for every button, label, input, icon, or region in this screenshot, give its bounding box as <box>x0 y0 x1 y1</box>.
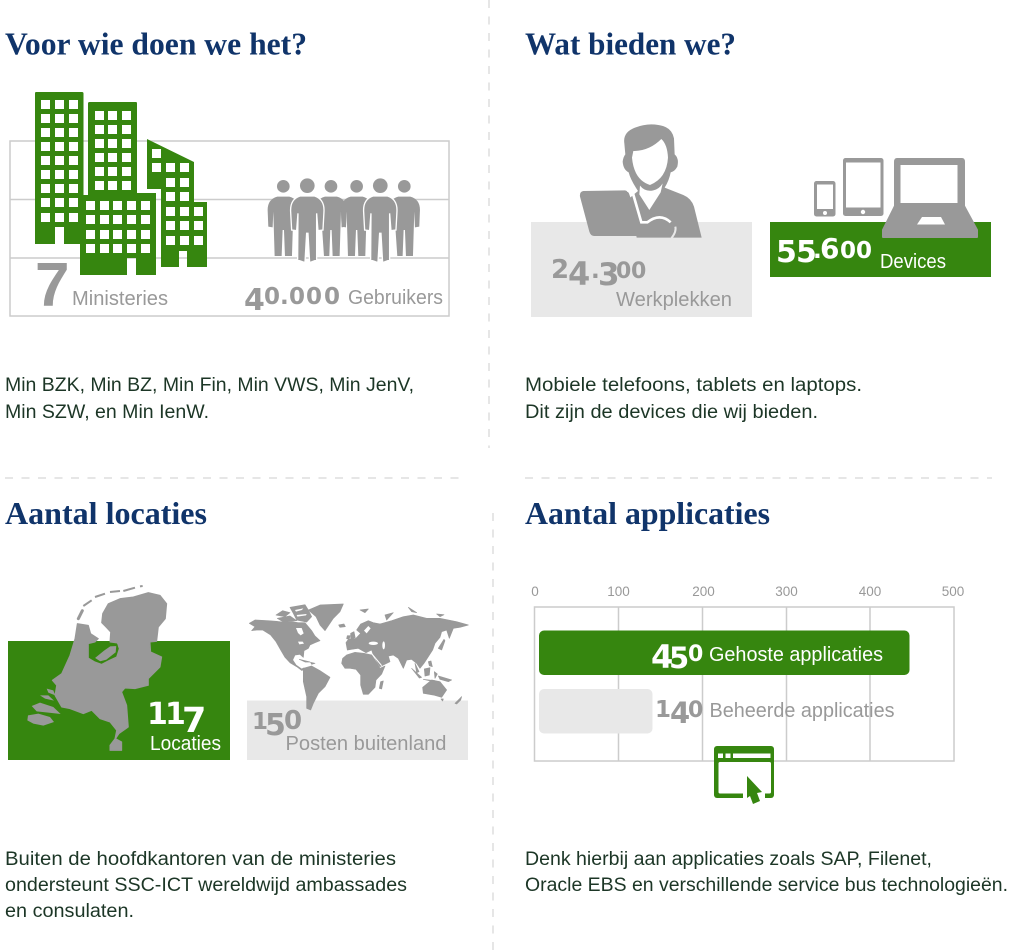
stat: 24.300 werkplekken: 4 <box>568 255 590 293</box>
stat: 450 gehoste applicaties: 4 <box>651 638 673 676</box>
axis labels: 400 <box>859 584 881 599</box>
icon: group of people <box>268 178 420 263</box>
stat: 150 posten buitenland: 5 <box>265 708 286 743</box>
text: applicaties description: Denk hierbij aan applicaties zoals SAP, Filenet, <box>525 849 932 870</box>
stat: 117 locaties: 1 <box>147 697 168 732</box>
bar: gehoste applicaties <box>539 630 910 675</box>
stat: 40.000 gebruikers <box>244 283 443 318</box>
stat: 150 posten buitenland: Posten buitenland <box>286 733 446 755</box>
stat: 40.000 gebruikers: 0 <box>324 284 340 310</box>
text: ministeries list: Min SZW, en Min IenW. <box>5 402 209 423</box>
icon: laptop <box>883 158 977 237</box>
bar: beheerde applicaties <box>539 689 652 734</box>
stat: 55.600 devices: Devices <box>880 251 946 273</box>
icon: map of the Netherlands <box>27 586 167 750</box>
axis labels: 300 <box>775 584 798 599</box>
panel: wat bieden we <box>525 26 991 423</box>
icon: phone <box>814 181 836 216</box>
stat: 55.600 devices: 0 <box>856 238 872 264</box>
text: locaties description <box>5 849 407 922</box>
text: applicaties description: Oracle EBS en verschillende service bus technologieën. <box>525 875 1008 896</box>
stat: 7 ministeries: 7 <box>35 251 69 320</box>
stat: 40.000 gebruikers: 0 <box>289 284 305 310</box>
icon: green office buildings <box>35 92 207 275</box>
stat: 40.000 gebruikers: Gebruikers <box>348 287 443 309</box>
stat box: devices <box>770 222 991 277</box>
stat: 40.000 gebruikers: . <box>280 284 289 310</box>
stat: 24.300 werkplekken: . <box>591 258 600 284</box>
stat: 55.600 devices: 0 <box>840 238 856 264</box>
icon: tablet <box>843 158 884 216</box>
heading: voor wie doen we het: Voor wie doen we het? <box>5 26 307 62</box>
icon: person with laptop <box>580 124 702 238</box>
heading: wat bieden we: Wat bieden we? <box>525 26 736 62</box>
heading: aantal locaties: Aantal locaties <box>5 495 207 531</box>
icon: world map <box>249 604 468 710</box>
stat: 24.300 werkplekken: 3 <box>598 257 620 293</box>
text: locaties description: en consulaten. <box>5 901 134 922</box>
stat: 450 gehoste applicaties <box>651 638 883 676</box>
stat: 117 locaties: Locaties <box>150 733 221 755</box>
text: applicaties description <box>525 849 1008 896</box>
stat: 150 posten buitenland <box>252 706 446 755</box>
stat: 450 gehoste applicaties: Gehoste applicaties <box>709 644 883 666</box>
stat: 40.000 gebruikers: 0 <box>306 284 322 310</box>
text: ministeries list: Min BZK, Min BZ, Min Fin, Min VWS, Min JenV, <box>5 375 414 396</box>
stat: 24.300 werkplekken: 0 <box>631 259 646 284</box>
stat: 55.600 devices <box>776 232 946 273</box>
text: devices description <box>525 375 862 423</box>
axis labels: 0 <box>531 584 539 599</box>
bar chart: applicaties <box>531 584 964 761</box>
stat: 117 locaties: 7 <box>182 701 206 741</box>
stat: 40.000 gebruikers: 0 <box>264 284 280 310</box>
stat: 117 locaties: 1 <box>165 697 186 732</box>
stat: 55.600 devices: 5 <box>776 235 797 270</box>
stat box: locaties <box>8 641 230 760</box>
stat: 140 beheerde applicaties <box>655 696 894 730</box>
stat: 117 locaties <box>147 697 221 755</box>
stat: 150 posten buitenland: 0 <box>284 706 302 736</box>
panel: aantal locaties <box>5 495 468 922</box>
text: locaties description: Buiten de hoofdkantoren van de ministeries <box>5 849 396 870</box>
stat: 55.600 devices: 5 <box>796 235 817 270</box>
stat: 24.300 werkplekken: 0 <box>616 259 631 284</box>
panel: voor wie doen we het <box>5 26 449 423</box>
stat: 140 beheerde applicaties: 0 <box>688 698 703 723</box>
axis labels: 200 <box>692 584 715 599</box>
text: ministeries list <box>5 375 414 423</box>
stat: 150 posten buitenland: 1 <box>252 709 268 735</box>
stat: 55.600 devices: 6 <box>820 232 839 265</box>
panel: aantal applicaties <box>525 495 1008 896</box>
stat: 450 gehoste applicaties: 0 <box>688 642 703 667</box>
stat: 140 beheerde applicaties: Beheerde applicaties <box>710 700 894 722</box>
stat: 40.000 gebruikers: 4 <box>244 283 265 318</box>
stat: 55.600 devices: . <box>813 238 822 264</box>
text: devices description: Dit zijn de devices die wij bieden. <box>525 402 818 423</box>
stat box: werkplekken <box>531 222 752 317</box>
axis labels: 100 <box>607 584 630 599</box>
chart grid: ministeries and gebruikers <box>10 141 449 316</box>
axis labels <box>531 584 964 599</box>
stat: 24.300 werkplekken: Werkplekken <box>616 289 732 311</box>
stat: 7 ministeries <box>35 251 168 320</box>
text: locaties description: ondersteunt SSC-ICT wereldwijd ambassades <box>5 875 407 896</box>
stat: 24.300 werkplekken <box>551 255 732 311</box>
stat: 140 beheerde applicaties: 4 <box>670 696 690 730</box>
stat: 450 gehoste applicaties: 5 <box>669 641 689 675</box>
axis labels: 500 <box>942 584 964 599</box>
stat: 140 beheerde applicaties: 1 <box>655 697 671 723</box>
stat: 7 ministeries: Ministeries <box>72 288 168 310</box>
heading: aantal applicaties: Aantal applicaties <box>525 495 770 531</box>
text: devices description: Mobiele telefoons, tablets en laptops. <box>525 375 862 396</box>
stat box: posten buitenland <box>247 700 468 760</box>
icon: application window with cursor <box>714 746 774 804</box>
stat: 24.300 werkplekken: 2 <box>551 255 569 285</box>
